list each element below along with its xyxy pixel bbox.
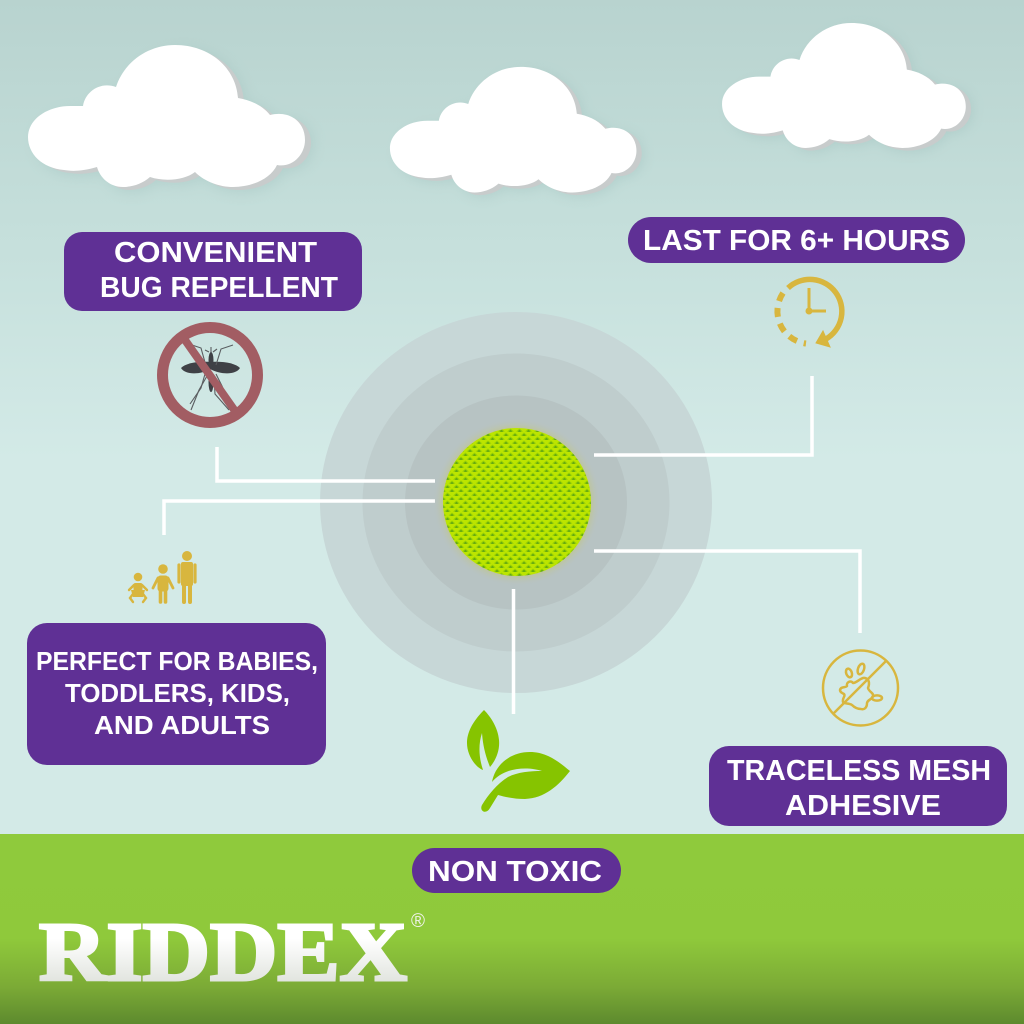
logo: RIDDEX: ®: [411, 911, 425, 932]
badge: convenient bug repellent: CONVENIENT: [114, 237, 317, 269]
badge: convenient bug repellent: BUG REPELLENT: [100, 272, 338, 304]
icon: leaves: [467, 710, 570, 812]
badge: convenient bug repellent: [64, 232, 362, 311]
badge: traceless mesh adhesive: ADHESIVE: [785, 790, 941, 822]
badge: non toxic: NON TOXIC: [428, 856, 602, 888]
icon: family: [129, 551, 195, 602]
connector lines: [164, 376, 860, 714]
badge: perfect for babies: AND ADULTS: [94, 710, 270, 740]
cloud center: [390, 67, 644, 197]
badge: non toxic: [412, 848, 621, 893]
concentric rings: [320, 312, 712, 693]
badge: perfect for babies: PERFECT FOR BABIES,: [36, 646, 318, 676]
badge: traceless mesh adhesive: [709, 746, 1007, 826]
badge: last for 6+ hours: LAST FOR 6+ HOURS: [643, 225, 950, 257]
green ground band: [0, 834, 1024, 1024]
cloud right: [722, 23, 973, 152]
mesh patch: [433, 418, 601, 586]
icon: no stain: [823, 650, 898, 726]
logo: RIDDEX: RIDDEX: [39, 906, 407, 999]
cloud left: [28, 45, 313, 192]
icon: clock: [777, 279, 842, 347]
badge: perfect for babies: TODDLERS, KIDS,: [65, 678, 290, 708]
badge: perfect for babies: [27, 623, 326, 765]
icon: no mosquito: [162, 328, 258, 422]
badge: traceless mesh adhesive: TRACELESS MESH: [727, 755, 991, 787]
badge: last for 6+ hours: [628, 217, 965, 263]
